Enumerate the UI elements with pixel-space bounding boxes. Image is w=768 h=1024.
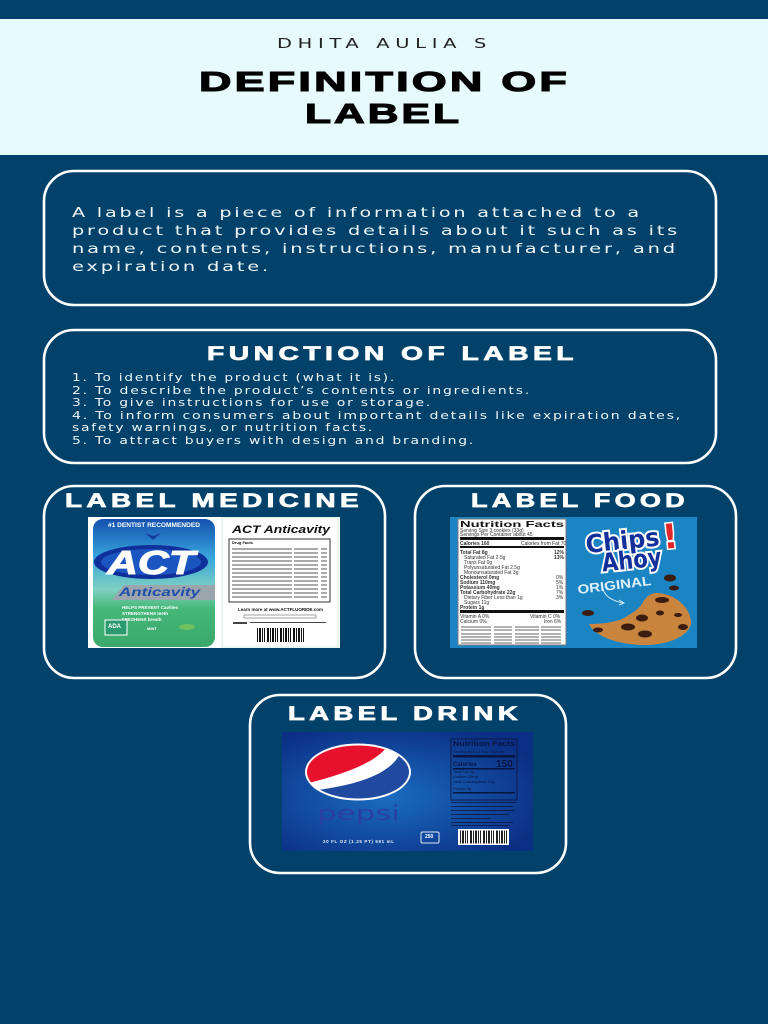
heading: label drink: LABEL DRINK [288,704,522,725]
image: Chips Ahoy label: Chips [584,522,661,559]
image: Pepsi label: Total Fat 0g [453,769,474,774]
function list: safety warnings, or nutrition facts. [72,421,374,434]
image: Pepsi label: 20 FL OZ (1.25 PT) 591 mL [323,839,394,844]
image: Chips Ahoy label: Vitamin C 0% [530,614,561,620]
function list: 4. To inform consumers about important details like expiration dates, [72,409,682,422]
image: Chips Ahoy label: Cholesterol 0mg [460,575,499,581]
image: Chips Ahoy label: Trans Fat 0g [464,560,492,566]
image: Pepsi label: Sodium 30mg [453,774,478,779]
image: Chips Ahoy label: 0% [556,575,564,581]
image: ACT mouthwash label [88,517,340,648]
image: Chips Ahoy label: Serving Size 3 cookies (33g) [460,528,524,534]
function list: 2. To describe the product’s contents or ingredients. [72,384,531,397]
image: ACT mouthwash label: MINT [147,626,157,631]
image: Chips Ahoy label: 3% [556,595,564,601]
image: ACT mouthwash label: Drug Facts [232,540,254,545]
image: Chips Ahoy label: 13% [554,555,565,561]
image: Chips Ahoy label: ORIGINAL [577,573,652,597]
image: Chips Ahoy label: Monounsaturated Fat 3g [464,570,519,576]
image: Chips Ahoy label: Polyunsaturated Fat 2.5g [464,565,520,571]
image: Pepsi label: Protein 0g [453,786,471,791]
image: Chips Ahoy label: Calories from Fat 70 [521,541,567,547]
image: ACT mouthwash label: #1 DENTIST RECOMMENDED [108,523,201,529]
header band [0,19,768,155]
title [199,66,570,129]
image: ACT mouthwash label: STRENGTHENS teeth [122,611,168,616]
image: Chips Ahoy label: Saturated Fat 2.5g [464,555,506,561]
image: Pepsi label: 250 [425,834,434,840]
image: Chips Ahoy label: Potassium 40mg [460,585,500,591]
image: ACT mouthwash label: Anticavity [118,585,202,599]
image: Chips Ahoy label: Calcium 0% [460,619,487,625]
image: Chips Ahoy label: Sodium 110mg [460,580,495,586]
definition text: product that provides details about it such as its [72,223,680,239]
panel: label food [415,486,736,678]
image: Pepsi label: Calories [453,762,477,768]
function list [72,371,682,447]
image: Chips Ahoy label: 7% [556,590,564,596]
title: LABEL [305,98,462,129]
image: Chips Ahoy label: Vitamin A 0% [460,614,490,620]
image: Chips Ahoy label: ! [660,517,680,558]
heading: label medicine: LABEL MEDICINE [65,491,363,512]
image: Chips Ahoy label: 12% [554,550,565,556]
panel: definition [44,171,716,305]
panel: function of label [44,330,716,463]
definition text [72,205,680,275]
image: Chips Ahoy label: 5% [556,580,564,586]
image: ACT mouthwash label: HELPS PREVENT Cavities [122,605,179,610]
image: ACT mouthwash label: ACT [106,544,199,581]
image: Pepsi label: Total Carbohydrate 41g [453,779,495,784]
image: Pepsi label: Serving size 12 fl oz (355 ml) [453,749,505,754]
heading: function of label: FUNCTION OF LABEL [207,344,578,365]
image: Pepsi label: Nutrition Facts [453,739,515,748]
image: Chips Ahoy label: Ahoy [600,542,663,577]
panel: label medicine [44,486,385,678]
image: Chips Ahoy label: Dietary Fiber Less than 1g [464,595,523,601]
image: Pepsi label [282,732,533,851]
definition text: A label is a piece of information attached to a [72,205,642,221]
panel: label drink [250,695,566,873]
function list: 5. To attract buyers with design and branding. [72,434,475,447]
image: Chips Ahoy label: Total Carbohydrate 22g [460,590,515,596]
image: ACT mouthwash label: Learn more at www.ACTFLUORIDE.com [238,607,323,612]
image: Chips Ahoy label: Total Fat 8g [460,550,488,556]
title: DEFINITION OF [199,66,570,97]
definition text: name, contents, instructions, manufacturer, and [72,241,678,257]
image: ACT mouthwash label: ACT Anticavity [231,524,331,536]
image: Chips Ahoy label: Protein 1g [460,605,484,611]
image: ACT mouthwash label: FRESHENS breath [122,617,162,622]
image: Chips Ahoy label: Servings Per Container about 45 [460,532,533,538]
function list: 3. To give instructions for use or storage. [72,396,432,409]
image: Chips Ahoy label: 1% [556,585,564,591]
heading: label food: LABEL FOOD [471,491,689,512]
image: ACT mouthwash label: ADA [108,624,122,630]
image: Chips Ahoy label: Sugars 11g [464,600,489,606]
author name: DHITA AULIA S [277,36,492,52]
function list: 1. To identify the product (what it is). [72,371,396,384]
image: Chips Ahoy label [450,517,697,648]
image: Pepsi label: pepsi [317,801,400,825]
image: Pepsi label: 150 [496,759,513,770]
definition text: expiration date. [72,259,271,275]
image: Chips Ahoy label: Iron 6% [544,619,562,625]
image: Chips Ahoy label: Nutrition Facts [460,519,564,529]
image: Chips Ahoy label: Calories 160 [460,541,490,547]
